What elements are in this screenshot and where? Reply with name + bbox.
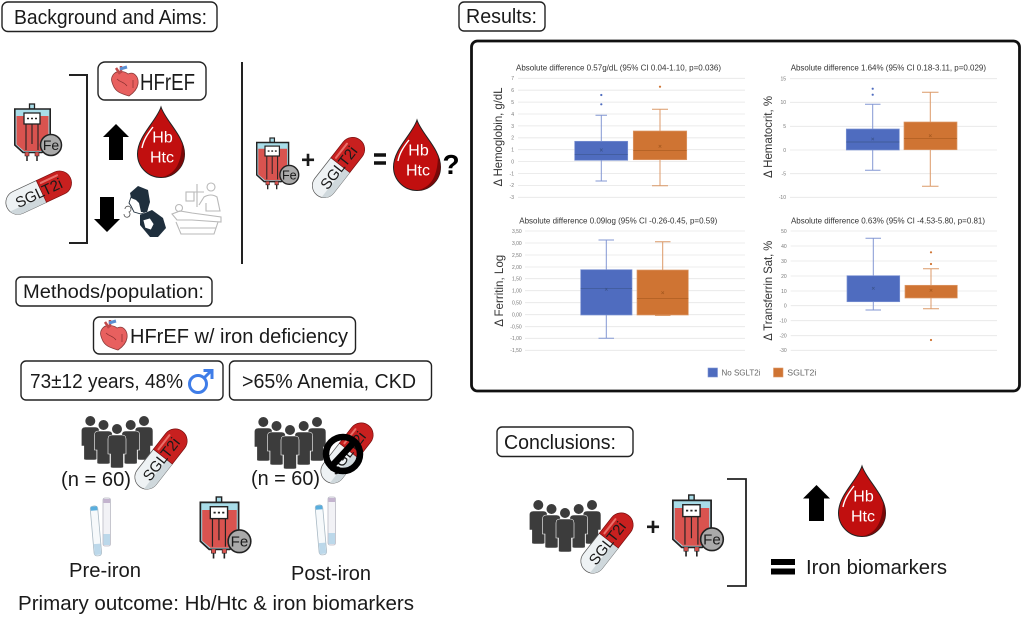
- icon: people: [529, 500, 601, 552]
- heading: Background and Aims: Background and Aims:: [14, 7, 207, 29]
- icon: people: [81, 416, 153, 468]
- heading: Results: Results:: [466, 6, 537, 28]
- chart: change in hematocrit: Δ Hematocrit, %: [761, 96, 775, 178]
- chart: change in ferritin: 3,50: [512, 229, 522, 235]
- chart: change in ferritin: 1,50: [512, 276, 522, 282]
- chart: change in hematocrit: -10: [779, 195, 786, 201]
- icon: SGLT2i pill: SGLT2i: [13, 175, 65, 212]
- question mark: ?: [442, 149, 460, 180]
- chart: change in hemoglobin: 1: [511, 148, 514, 154]
- icon: crossed-out pill: SGLT2i: [326, 429, 370, 479]
- icon: iron bag: [257, 138, 299, 189]
- box: HFrEF with iron deficiency: HFrEF w/ iron deficiency: [130, 326, 348, 348]
- chart: change in hematocrit: 0: [783, 148, 786, 154]
- icon: pre-iron test tubes: [90, 498, 110, 556]
- panel: results: [472, 41, 1020, 391]
- box: age and sex: [21, 361, 223, 400]
- chart: change in hemoglobin: Absolute difference 0.57g/dL (95% CI 0.04-1.10, p=0.036): [516, 64, 721, 73]
- chart: change in ferritin: [492, 217, 745, 354]
- icon: pill: [307, 133, 370, 202]
- plus sign: +: [301, 147, 315, 174]
- chart: change in hemoglobin: 3: [511, 124, 514, 130]
- icon: blood drop Hb Htc: Hb: [152, 130, 173, 146]
- chart: change in hemoglobin: [491, 64, 745, 201]
- chart: change in hematocrit: -5: [782, 172, 786, 178]
- chart: change in ferritin: Δ Ferritin, Log: [492, 255, 506, 327]
- icon: pill: SGLT2i: [317, 143, 361, 193]
- group: no SGLT2i patients: [251, 417, 378, 490]
- bracket: [69, 75, 87, 243]
- icon: pill: SGLT2i: [140, 435, 184, 485]
- chart: change in transferrin saturation: -30: [779, 348, 787, 354]
- chart: change in ferritin: 0,50: [512, 300, 522, 306]
- chart: change in transferrin saturation: 20: [781, 274, 787, 280]
- chart: change in transferrin saturation: [761, 217, 997, 354]
- icon: blood drop Hb Htc: [138, 107, 184, 178]
- icon: iron bag: Fe: [703, 532, 721, 549]
- chart: change in ferritin: -0,50: [510, 324, 522, 330]
- arrow: up: [103, 124, 129, 160]
- chart: change in hemoglobin: 5: [511, 100, 514, 106]
- legend: No SGLT2i: [722, 368, 761, 378]
- box: age and sex: 73±12 years, 48%: [30, 371, 183, 393]
- label: pre-iron: Pre-iron: [69, 560, 141, 582]
- chart: change in hemoglobin: 7: [511, 76, 514, 82]
- chart: change in hemoglobin: -1: [510, 172, 514, 178]
- heading: Background and Aims: [2, 2, 217, 32]
- chart: change in hematocrit: 15: [780, 76, 786, 82]
- chart: change in ferritin: 2,50: [512, 253, 522, 259]
- legend: [708, 368, 816, 378]
- chart: change in hematocrit: Absolute difference 1.64% (95% CI 0.18-3.11, p=0.029): [791, 64, 986, 73]
- icon: blood drop: [394, 120, 440, 191]
- icon: coughing patient: [124, 186, 166, 237]
- arrow: up: [803, 485, 830, 521]
- icon: blood drop Hb Htc: Htc: [150, 150, 174, 166]
- icon: blood drop: Htc: [406, 162, 430, 180]
- heading: Conclusions: Conclusions:: [504, 432, 616, 454]
- bracket: [727, 479, 746, 586]
- group: SGLT2i patients: [61, 416, 192, 494]
- icon: post-iron test tubes: [315, 497, 336, 555]
- box: HFrEF: HFrEF: [140, 69, 195, 95]
- box: anemia and CKD: [230, 361, 432, 400]
- chart: change in transferrin saturation: 0: [784, 304, 787, 310]
- chart: change in hemoglobin: 4: [511, 112, 514, 118]
- panel: background and aims: [2, 62, 221, 243]
- heading: Results: [459, 2, 545, 31]
- text: primary outcome: Primary outcome: Hb/Htc & iron biomarkers: [18, 593, 414, 615]
- chart: change in hemoglobin: 2: [511, 136, 514, 142]
- box: anemia and CKD: >65% Anemia, CKD: [242, 371, 416, 393]
- chart: change in hemoglobin: Δ Hemoglobin, g/dL: [491, 87, 505, 186]
- icon: iron infusion bag: [15, 104, 62, 161]
- chart: change in ferritin: -1,00: [510, 336, 522, 342]
- icon: iron bag: Fe: [231, 534, 248, 551]
- divider line: [241, 62, 243, 264]
- box: HFrEF with iron deficiency: [94, 317, 356, 354]
- chart: change in ferritin: 1,00: [512, 288, 522, 294]
- icon: iron bag: Fe: [282, 168, 297, 182]
- icon: SGLT2i pill: [2, 167, 75, 218]
- label: iron biomarkers: Iron biomarkers: [806, 557, 947, 579]
- heading: Methods/population: Methods/population:: [23, 282, 204, 303]
- chart: change in transferrin saturation: 50: [781, 229, 787, 235]
- chart: change in ferritin: -1,50: [510, 348, 522, 354]
- chart: change in hemoglobin: 0: [511, 160, 514, 166]
- chart: change in hematocrit: 10: [780, 100, 786, 106]
- heading: Conclusions: [497, 427, 633, 456]
- heading: Methods/population: [16, 277, 212, 306]
- equation: iron plus SGLT2i equals Hb Htc: [257, 120, 460, 202]
- icon: iron bag: [673, 495, 723, 557]
- label: post-iron: Post-iron: [291, 563, 371, 585]
- chart: change in hemoglobin: -3: [510, 195, 514, 201]
- plus sign: +: [646, 514, 660, 541]
- icon: blood drop: [838, 466, 886, 537]
- box: HFrEF: [98, 62, 206, 100]
- equals sign: [771, 559, 795, 574]
- chart: change in transferrin saturation: 10: [781, 289, 787, 295]
- chart: change in ferritin: 0,00: [512, 312, 522, 318]
- equals sign: [374, 155, 386, 163]
- n label: (n = 60): [251, 468, 320, 490]
- icon: iron infusion bag: Fe: [43, 137, 59, 153]
- chart: change in transferrin saturation: 40: [781, 244, 787, 250]
- chart: change in transferrin saturation: Absolute difference 0.63% (95% CI -4.53-5.80, p=0.81): [791, 217, 985, 226]
- chart: change in hemoglobin: -2: [510, 183, 514, 189]
- chart: change in hematocrit: [761, 64, 997, 201]
- icon: hospital bed with nurse: [172, 183, 221, 234]
- chart: change in hematocrit: 5: [783, 124, 786, 130]
- chart: change in transferrin saturation: -10: [779, 318, 787, 324]
- chart: change in transferrin saturation: -20: [779, 334, 787, 340]
- chart: change in transferrin saturation: Δ Transferrin Sat, %: [761, 240, 775, 341]
- icon: pill: SGLT2i: [586, 519, 630, 569]
- chart: change in ferritin: 2,00: [512, 265, 522, 271]
- icon: pill: [576, 508, 638, 578]
- icon: blood drop: Htc: [851, 508, 875, 526]
- legend: SGLT2i: [787, 368, 816, 378]
- icon: iron bag: [200, 497, 251, 559]
- n label: (n = 60): [61, 469, 131, 491]
- chart: change in hemoglobin: 6: [511, 88, 514, 94]
- arrow: down: [94, 197, 120, 232]
- icon: male symbol: [190, 370, 212, 392]
- icon: blood drop: Hb: [853, 488, 874, 506]
- panel: conclusions: [529, 466, 947, 586]
- chart: change in ferritin: 3,00: [512, 241, 522, 247]
- icon: blood drop: Hb: [408, 142, 429, 160]
- chart: change in transferrin saturation: 30: [781, 259, 787, 265]
- chart: change in ferritin: Absolute difference 0.09log (95% CI -0.26-0.45, p=0.59): [519, 217, 718, 226]
- icon: people: [254, 417, 326, 469]
